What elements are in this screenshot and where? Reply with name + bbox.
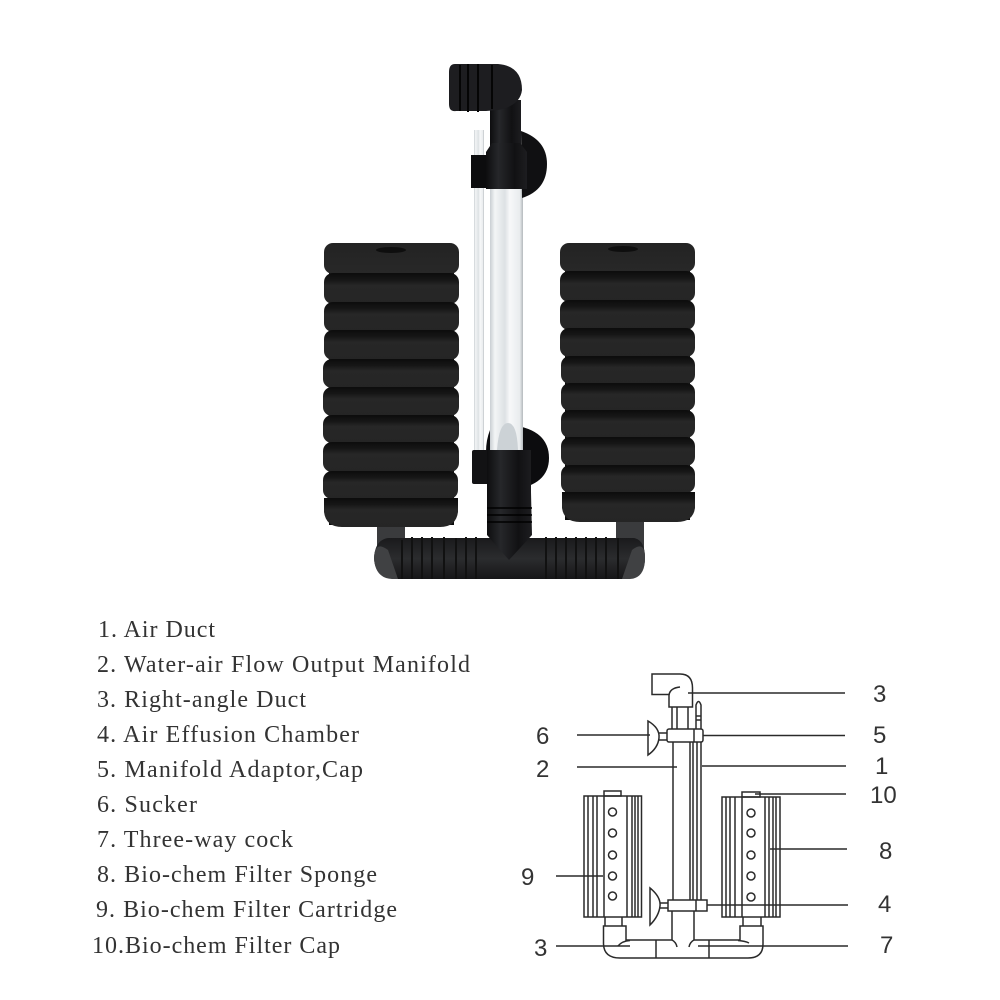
item 8: 8. Bio-chem Filter Sponge bbox=[97, 862, 377, 888]
diagram: left sponge bbox=[584, 791, 642, 926]
item 6: 6. Sucker bbox=[97, 792, 197, 818]
item 2: 2. Water-air Flow Output Manifold bbox=[97, 652, 470, 678]
diagram: right sponge bbox=[722, 792, 780, 926]
callout numbers: 2 bbox=[536, 756, 549, 783]
lower cap and stem bbox=[472, 450, 532, 560]
right-angle elbow and cap bbox=[449, 64, 527, 189]
leader lines bbox=[556, 693, 848, 946]
callout numbers: 3 bbox=[534, 935, 547, 962]
item 5: 5. Manifold Adaptor,Cap bbox=[97, 757, 363, 783]
upper sucker bbox=[521, 131, 547, 198]
item 1: 1. Air Duct bbox=[98, 617, 215, 643]
product photo: sponge filter bbox=[323, 64, 695, 579]
bottom T manifold bbox=[374, 522, 645, 579]
item 3: 3. Right-angle Duct bbox=[97, 687, 306, 713]
thin air tube bbox=[474, 130, 484, 452]
technical diagram bbox=[521, 674, 897, 962]
callout numbers: 7 bbox=[880, 932, 893, 959]
callout numbers: 1 bbox=[875, 753, 888, 780]
callout numbers: 3 bbox=[873, 681, 886, 708]
item 10: 10.Bio-chem Filter Cap bbox=[92, 933, 340, 959]
parts list bbox=[92, 617, 470, 959]
item 9: 9. Bio-chem Filter Cartridge bbox=[96, 897, 397, 923]
left sponge bbox=[323, 243, 459, 527]
diagram: top elbow bbox=[652, 674, 692, 729]
lower sucker bbox=[486, 425, 549, 490]
callout numbers: 5 bbox=[873, 722, 886, 749]
callout numbers: 9 bbox=[521, 864, 534, 891]
callout numbers: 8 bbox=[879, 838, 892, 865]
diagram: upper adapter and sucker bbox=[648, 721, 703, 755]
callout numbers: 6 bbox=[536, 723, 549, 750]
callout numbers: 4 bbox=[878, 891, 891, 918]
item 7: 7. Three-way cock bbox=[97, 827, 293, 853]
diagram: central tubes bbox=[673, 702, 701, 900]
item 4: 4. Air Effusion Chamber bbox=[97, 722, 359, 748]
callout numbers: 10 bbox=[870, 782, 897, 809]
callout numbers bbox=[521, 681, 897, 962]
right sponge bbox=[560, 243, 695, 522]
clear main tube bbox=[490, 185, 523, 455]
diagram: lower adapter and sucker bbox=[650, 888, 707, 925]
diagram: bottom three-way manifold bbox=[604, 911, 763, 958]
